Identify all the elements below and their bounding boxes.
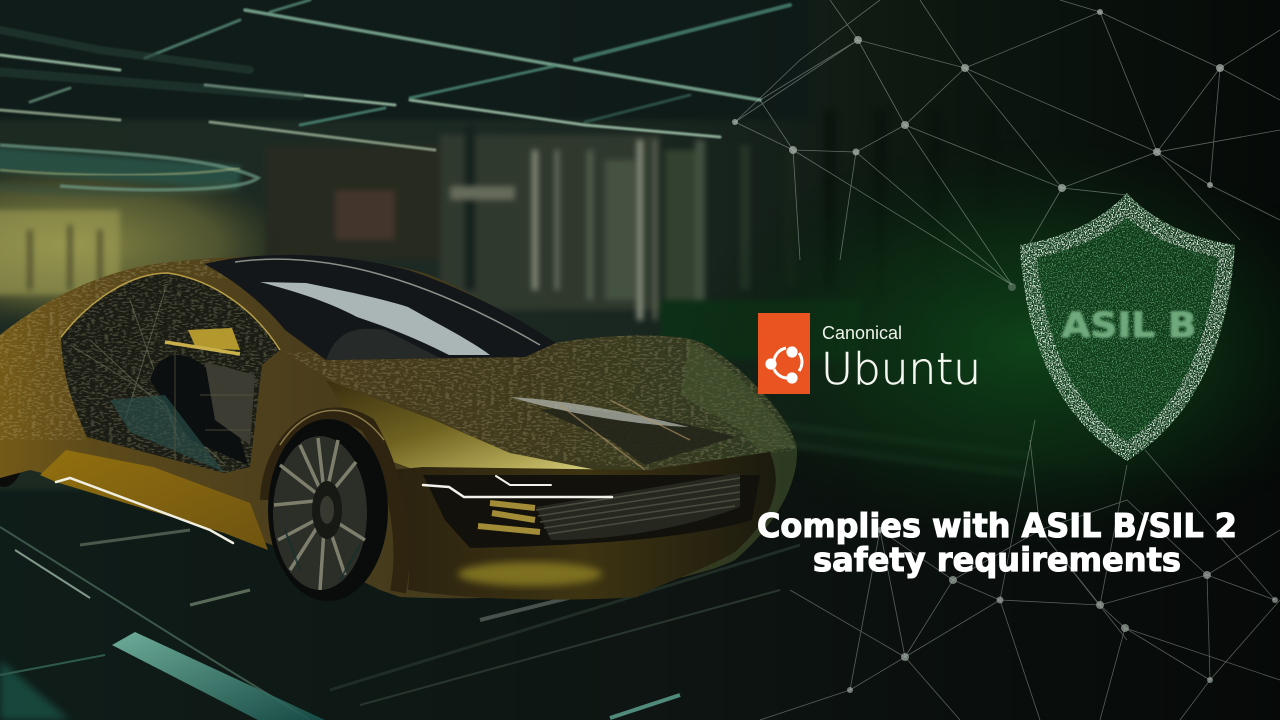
- Canonical wordmark: Canonical: [822, 323, 902, 343]
- green glow behind shield: [690, 140, 1280, 550]
- front dark lower body: [390, 452, 776, 600]
- front wheel arch: [268, 415, 401, 592]
- windshield: [204, 255, 556, 360]
- network lines top right: [735, 0, 1280, 285]
- ceiling beams: [0, 0, 790, 150]
- lower bumper highlight: [458, 562, 602, 586]
- rear wheel: [0, 379, 28, 487]
- ASIL B label: ASIL B: [1062, 306, 1196, 346]
- Ubuntu wordmark: Ubuntu: [821, 344, 981, 395]
- teal floor bar: [112, 632, 325, 720]
- shield fill: [1037, 218, 1218, 441]
- hood: [510, 342, 796, 470]
- caption line 1: Complies with ASIL B/SIL 2: [757, 506, 1237, 545]
- dark ceiling: [0, 0, 810, 120]
- tube ring: [0, 145, 258, 190]
- car: [0, 255, 797, 601]
- shield icon: [1020, 193, 1235, 461]
- caption: [757, 506, 1237, 579]
- shield speckled border: [1020, 193, 1235, 461]
- caption line 2: safety requirements: [813, 540, 1181, 579]
- gold sill: [40, 450, 268, 550]
- yellow back-wall glow: [0, 160, 300, 330]
- floor platform panels: [0, 527, 800, 720]
- front grille: [478, 473, 740, 540]
- Ubuntu logo: [758, 313, 981, 395]
- car body shell: [0, 256, 797, 598]
- fender highlight: [326, 380, 612, 473]
- floor: [0, 445, 1280, 720]
- orange square with circle of friends: [758, 313, 810, 394]
- network nodes bottom right: [847, 526, 1278, 693]
- front wheel: [268, 419, 388, 601]
- network lines bottom right: [760, 420, 1280, 720]
- wire texture on body: [0, 259, 797, 470]
- wall panels: [440, 135, 660, 310]
- arc highlight of door frame: [61, 273, 280, 350]
- side window with interior: [61, 273, 280, 473]
- light strips: [56, 476, 612, 543]
- network nodes top right: [732, 9, 1224, 291]
